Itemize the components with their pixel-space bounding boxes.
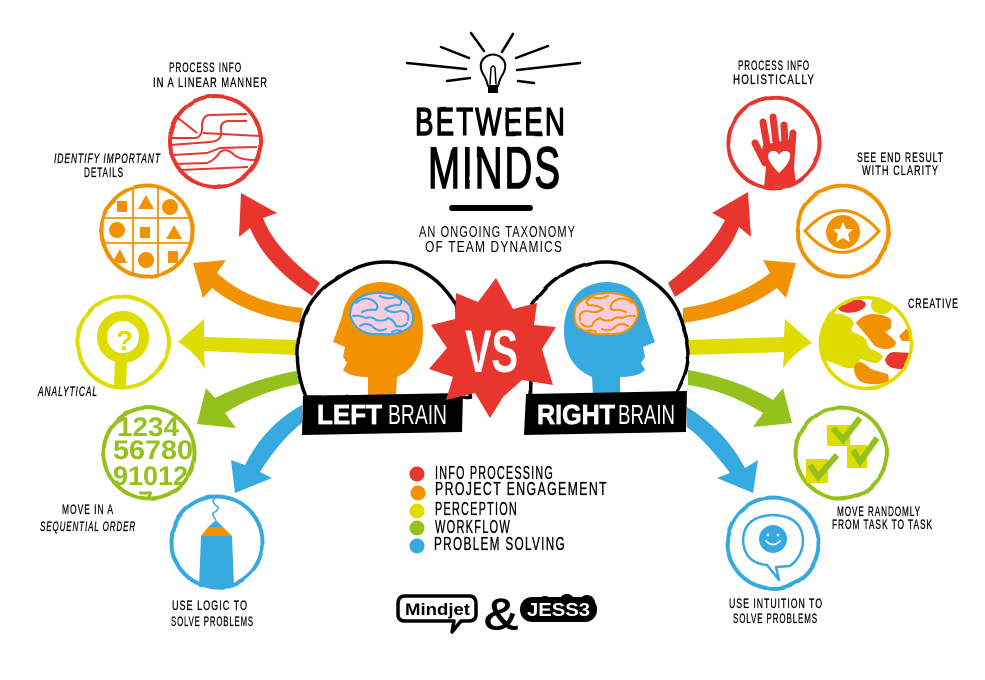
title: BETWEEN [415, 101, 567, 144]
arrows: right brain [668, 192, 812, 493]
panel: use intuition to solve problems [728, 498, 823, 626]
panel: move randomly from task to task [796, 408, 933, 532]
icon: numbers circle [101, 405, 196, 501]
title [415, 101, 567, 201]
legend: project engagement: PROJECT ENGAGEMENT [435, 479, 608, 499]
logo: jess3 [520, 594, 597, 622]
versus burst [429, 278, 556, 418]
panel: analytical [37, 296, 169, 399]
icon: numbers circle: 3 [188, 461, 203, 491]
caption: SOLVE PROBLEMS [171, 614, 254, 629]
arrow: right green [688, 370, 792, 427]
label: left brain [302, 393, 463, 435]
caption: MOVE IN A [62, 502, 114, 517]
label: left brain: BRAIN [388, 399, 447, 430]
arrows: left brain [178, 193, 320, 493]
icon: pencil circle [172, 495, 262, 588]
head silhouette orange [333, 282, 423, 395]
caption: IN A LINEAR MANNER [153, 75, 268, 90]
title underline [452, 205, 530, 211]
caption [171, 598, 254, 629]
panel: process info in a linear manner [153, 60, 268, 187]
panel: right brain head [530, 262, 688, 397]
legend: project engagement [410, 479, 608, 500]
caption: DETAILS [84, 165, 124, 180]
caption [733, 58, 815, 87]
panel: creative [815, 296, 959, 388]
caption [857, 150, 944, 178]
icon: magnifier with question mark: ? [116, 325, 133, 356]
legend: info processing: INFO PROCESSING [435, 463, 554, 483]
legend: workflow: WORKFLOW [435, 517, 511, 537]
caption [40, 502, 136, 534]
logo: jess3: JESS3 [527, 600, 590, 620]
caption: SOLVE PROBLEMS [733, 611, 818, 626]
label: right brain: BRAIN [618, 399, 675, 430]
arrow: left green [197, 370, 305, 428]
arrow: right red [668, 192, 751, 297]
arrow: left yellow [178, 319, 297, 369]
title: MINDS [428, 136, 562, 201]
caption [832, 504, 933, 532]
caption: USE LOGIC TO [172, 598, 248, 613]
versus burst: VS [465, 318, 518, 385]
legend [410, 463, 608, 554]
panel: see end result with clarity [798, 150, 944, 276]
icon: numbers circle: 56780 [113, 435, 193, 465]
icon: numbers circle: 7 [138, 486, 153, 516]
arrow: right orange [683, 260, 796, 323]
caption [54, 151, 161, 180]
caption: USE INTUITION TO [729, 596, 823, 611]
caption: HOLISTICALLY [733, 72, 815, 87]
arrow: left orange [193, 260, 303, 323]
brain right [574, 293, 638, 334]
arrow: left red [239, 193, 320, 296]
logo: mindjet: Mindjet [405, 600, 470, 619]
panel: use logic to solve problems [171, 495, 262, 629]
icon: speech bubble with smiley [728, 498, 818, 588]
legend: info processing [410, 463, 554, 483]
caption [153, 60, 268, 90]
legend: perception [410, 499, 518, 519]
icon: hand with heart [728, 98, 820, 188]
caption: IDENTIFY IMPORTANT [54, 151, 161, 166]
head silhouette blue [564, 282, 655, 395]
subtitle [419, 224, 576, 256]
label: right brain [524, 391, 687, 435]
brain left [350, 293, 413, 334]
dome outline left [297, 262, 470, 397]
logo: mindjet [398, 596, 476, 632]
label: left brain: LEFT [317, 399, 382, 430]
icon: eye with star [798, 186, 888, 276]
caption: ANALYTICAL [37, 384, 98, 399]
arrow: right yellow [688, 319, 812, 368]
caption: WITH CLARITY [862, 163, 939, 178]
subtitle: OF TEAM DYNAMICS [425, 239, 563, 256]
icon: tangled lines circle [170, 96, 261, 187]
legend: problem solving [410, 534, 566, 554]
panel: left brain head [297, 262, 470, 397]
arrow: right blue [687, 407, 758, 493]
icon: check boxes circle [796, 408, 886, 498]
panel: identify important details [54, 151, 195, 280]
caption: MOVE RANDOMLY [837, 504, 921, 519]
icon: numbers circle: 1234 [117, 412, 179, 442]
icon: shapes grid circle [100, 185, 195, 280]
arrow: left blue [231, 405, 302, 493]
icon: numbers circle: 91012 [113, 461, 188, 491]
caption: PROCESS INFO [738, 58, 810, 73]
icon: light bulb with rays [407, 33, 580, 90]
icon: painted blob circle [815, 296, 914, 388]
legend: workflow [410, 517, 511, 537]
caption [729, 596, 823, 626]
caption: SEQUENTIAL ORDER [40, 519, 136, 534]
caption: PROCESS INFO [169, 60, 242, 75]
panel: move in a sequential order [40, 408, 203, 534]
dome outline right [530, 262, 688, 397]
ampersand: & [484, 590, 518, 639]
subtitle: AN ONGOING TAXONOMY [419, 224, 576, 241]
legend: perception: PERCEPTION [435, 499, 518, 519]
panel: process info holistically [728, 58, 820, 188]
caption: CREATIVE [908, 296, 959, 311]
label: right brain: RIGHT [537, 399, 615, 430]
legend: problem solving: PROBLEM SOLVING [434, 534, 566, 554]
